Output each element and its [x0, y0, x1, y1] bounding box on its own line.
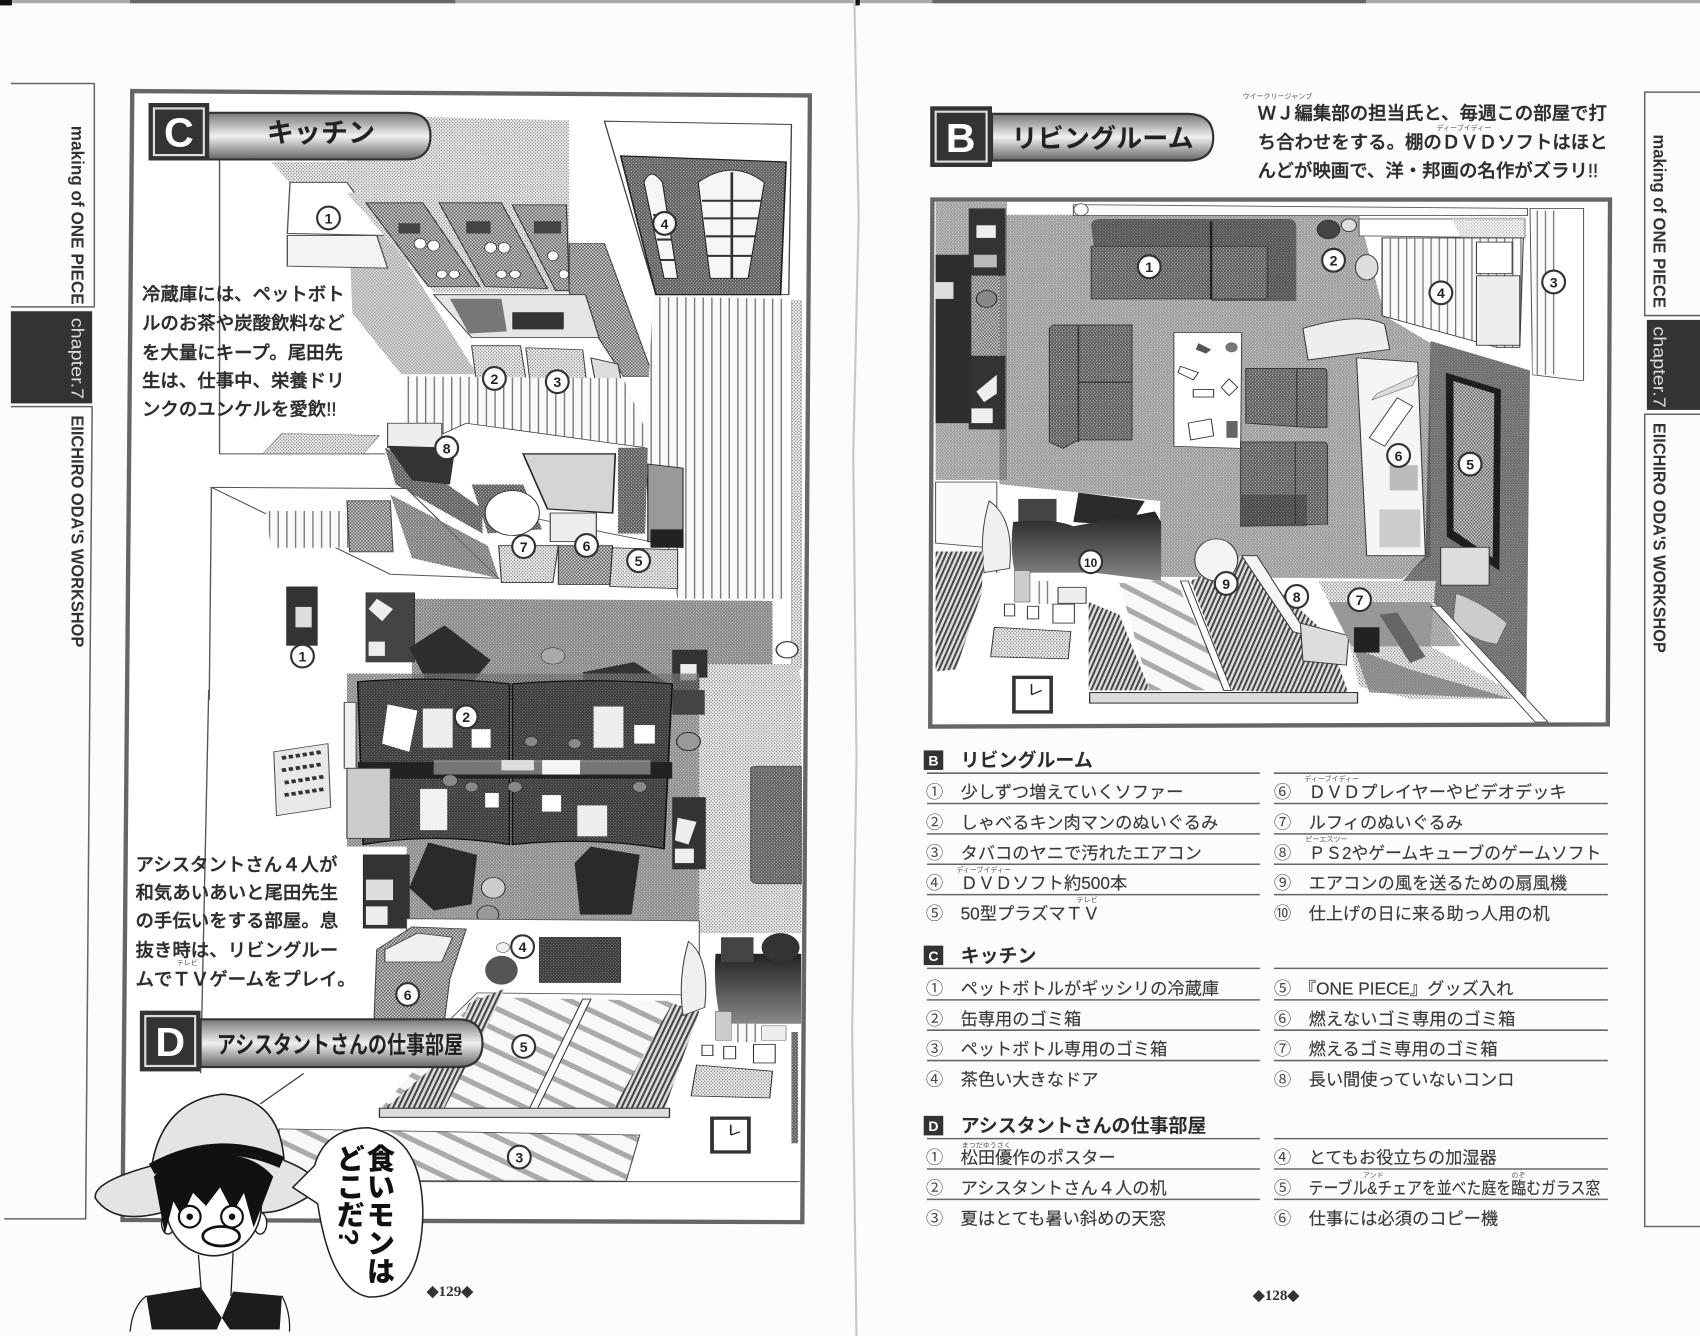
labels: living room numbers: 9: [1222, 576, 1230, 592]
list heading C: キッチン: [961, 946, 1036, 967]
callout: speech bubble: どこだ?: [333, 1144, 365, 1246]
list: D assistants room: ③: [926, 1208, 943, 1228]
page number 128: ◆128◆: [1252, 1287, 1299, 1304]
labels: kitchen and office numbers: 3: [515, 1149, 523, 1165]
labels: kitchen and office numbers: 1: [325, 210, 333, 226]
list: B living room: ①: [926, 782, 943, 802]
text block: assistants note: ムでＴＶゲームをプレイ。: [136, 969, 356, 990]
heading: D assistants room: アシスタントさんの仕事部屋: [217, 1032, 463, 1059]
list heading C: [924, 946, 1036, 967]
text block: assistants note: アシスタントさん４人が: [136, 854, 337, 875]
tab text: making of ONE PIECE: making of ONE PIECE: [1649, 134, 1669, 308]
tab text: chapter.7: chapter.7: [1649, 326, 1669, 408]
list: C kitchen: ②: [926, 1009, 943, 1029]
list: D assistants room: ②: [926, 1178, 943, 1198]
labels: living room numbers: 6: [1395, 448, 1403, 464]
list: B living room: テレビ: [1077, 895, 1098, 904]
list: B living room: 仕上げの日に来る助っ人用の机: [1309, 904, 1550, 924]
list: C kitchen: 『ONE PIECE』グッズ入れ: [1299, 978, 1513, 998]
text block: assistants note: 抜き時は、リビングルー: [136, 939, 338, 960]
text block: assistants note: テレビ: [177, 958, 198, 967]
list: B living room: ディーブイディー: [1304, 774, 1359, 783]
list: C kitchen: 長い間使っていないコンロ: [1309, 1069, 1515, 1090]
list: B living room: [924, 749, 1608, 924]
list: B living room: ＤＶＤプレイヤーやビデオデッキ: [1309, 782, 1567, 802]
list: B living room: ピーエスツー: [1305, 836, 1348, 844]
heading: C kitchen: [149, 103, 430, 160]
list: D assistants room: アンド: [1363, 1172, 1384, 1180]
text block: kitchen note: [142, 283, 345, 419]
list: C kitchen: ペットボトル専用のゴミ箱: [961, 1039, 1167, 1059]
list: C kitchen: ⑤: [1274, 978, 1291, 998]
callout: speech bubble: 食いモンは: [363, 1144, 395, 1285]
list: C kitchen: ③: [926, 1039, 943, 1059]
page number 129: ◆129◆: [426, 1283, 473, 1300]
text block: living room note: [1242, 93, 1608, 181]
heading: D assistants room: [140, 1011, 482, 1071]
tab text: chapter.7: chapter.7: [68, 318, 88, 399]
list: B living room: ディーブイディー: [956, 865, 1011, 874]
list heading C: C: [928, 948, 939, 964]
list heading B: リビングルーム: [961, 749, 1093, 772]
book spine crease: [852, 0, 859, 1336]
list: C kitchen: ①: [926, 978, 943, 998]
list: D assistants room: 松田優作のポスター: [961, 1148, 1116, 1168]
labels: kitchen and office numbers: 4: [661, 216, 669, 232]
labels: living room numbers: [1079, 249, 1565, 611]
list: B living room: ⑦: [1274, 812, 1291, 832]
labels: living room numbers: 2: [1330, 253, 1338, 269]
right page side tab: [1645, 92, 1700, 1226]
labels: kitchen and office numbers: 7: [520, 539, 528, 555]
list: D assistants room: アシスタントさん４人の机: [961, 1178, 1167, 1198]
list: B living room: ⑤: [926, 904, 943, 924]
list: B living room: エアコンの風を送るための扇風機: [1309, 873, 1567, 893]
list: C kitchen: ⑥: [1274, 1009, 1291, 1029]
labels: kitchen and office numbers: 3: [553, 374, 561, 390]
text block: living room note: ディーブイディー: [1437, 123, 1491, 132]
list: C kitchen: ⑦: [1274, 1039, 1291, 1059]
list: D assistants room: ④: [1274, 1148, 1291, 1168]
list heading D: アシスタントさんの仕事部屋: [961, 1115, 1206, 1137]
heading: B living room: リビングルーム: [1012, 123, 1194, 153]
labels: kitchen and office numbers: 6: [404, 987, 412, 1003]
labels: kitchen and office numbers: 4: [519, 939, 527, 955]
list: B living room: 少しずつ増えていくソファー: [961, 782, 1183, 802]
list: C kitchen: 燃えるゴミ専用のゴミ箱: [1309, 1039, 1498, 1059]
left page side tab: [4, 84, 94, 1219]
labels: kitchen and office numbers: 5: [520, 1039, 528, 1055]
labels: living room numbers: 4: [1437, 285, 1445, 301]
list: B living room: ⑥: [1274, 782, 1291, 802]
text block: assistants note: 和気あいあいと尾田先生: [136, 882, 338, 903]
kitchen illustration: [209, 115, 801, 700]
text block: living room note: ち合わせをする。棚のＤＶＤソフトはほと: [1258, 132, 1608, 153]
text block: kitchen note: を大量にキープ。尾田先: [142, 342, 343, 363]
list: D assistants room: テーブル&チェアを並べた庭を臨むガラス窓: [1309, 1178, 1600, 1198]
list: B living room: ⑨: [1274, 873, 1291, 893]
text block: kitchen note: 冷蔵庫には、ペットボト: [142, 283, 345, 304]
illustration: Luffy character: [95, 1074, 317, 1332]
list heading B: B: [928, 753, 939, 769]
list: C kitchen: [924, 946, 1608, 1090]
labels: living room numbers: 7: [1356, 592, 1364, 608]
list: D assistants room: ①: [926, 1148, 943, 1168]
text block: living room note: ＷＪ編集部の担当氏と、毎週この部屋で打: [1258, 102, 1607, 123]
list: D assistants room: ⑤: [1274, 1178, 1291, 1198]
list: B living room: タバコのヤニで汚れたエアコン: [961, 843, 1202, 863]
list: B living room: ③: [926, 843, 943, 863]
list: D assistants room: まつだゆうさく: [962, 1141, 1011, 1149]
list: B living room: ルフィのぬいぐるみ: [1309, 812, 1463, 832]
labels: kitchen and office numbers: 2: [462, 709, 470, 725]
labels: kitchen and office numbers: 1: [299, 648, 307, 664]
list: D assistants room: [924, 1115, 1608, 1228]
text block: living room note: ウイークリージャンプ: [1242, 93, 1312, 101]
list: B living room: しゃべるキン肉マンのぬいぐるみ: [961, 812, 1218, 832]
list: C kitchen: ⑧: [1274, 1069, 1291, 1090]
list: C kitchen: 茶色い大きなドア: [961, 1069, 1098, 1090]
list: D assistants room: とてもお役立ちの加湿器: [1309, 1148, 1497, 1168]
list: C kitchen: 燃えないゴミ専用のゴミ箱: [1309, 1009, 1515, 1029]
list: B living room: ⑩: [1274, 904, 1291, 924]
labels: kitchen and office numbers: 6: [583, 538, 591, 554]
labels: kitchen and office numbers: [291, 207, 676, 1168]
list: B living room: ⑧: [1274, 843, 1291, 863]
list: D assistants room: 夏はとても暑い斜めの天窓: [961, 1208, 1166, 1228]
list: B living room: 50型プラズマＴＶ: [961, 904, 1100, 924]
top edge scan marks: [0, 0, 1700, 5]
text block: kitchen note: ンクのユンケルを愛飲!!: [142, 398, 336, 419]
callout: speech bubble: [293, 1128, 423, 1297]
labels: kitchen and office numbers: 5: [635, 553, 643, 569]
text block: kitchen note: 生は、仕事中、栄養ドリ: [142, 370, 345, 391]
list: D assistants room: ⑥: [1274, 1208, 1291, 1228]
list: B living room: ＤＶＤソフト約500本: [961, 873, 1127, 893]
list: C kitchen: ④: [926, 1069, 943, 1090]
heading: B living room: [930, 106, 1213, 167]
labels: living room numbers: 8: [1293, 589, 1301, 605]
list heading D: D: [928, 1118, 939, 1134]
list: B living room: ②: [926, 812, 943, 832]
tab text: making of ONE PIECE: making of ONE PIECE: [68, 126, 88, 305]
heading: B living room: B: [946, 115, 975, 161]
list: C kitchen: 缶専用のゴミ箱: [961, 1009, 1081, 1029]
panel: living room floor plan: [930, 200, 1610, 727]
tab text: workshop: EIICHIRO ODA'S WORKSHOP: [1649, 423, 1669, 653]
labels: living room numbers: 1: [1145, 259, 1153, 275]
list: C kitchen: ペットボトルがギッシリの冷蔵庫: [961, 978, 1219, 998]
text block: assistants note: の手伝いをする部屋。息: [136, 910, 338, 931]
labels: living room numbers: 10: [1084, 556, 1098, 570]
text block: assistants note: [136, 854, 356, 990]
living room illustration: [936, 202, 1601, 722]
panel: left floor plan frame: [123, 91, 810, 1222]
list: D assistants room: 仕事には必須のコピー機: [1309, 1208, 1498, 1228]
tab text: workshop: EIICHIRO ODA'S WORKSHOP: [68, 415, 88, 647]
list: B living room: ④: [926, 873, 943, 893]
labels: living room numbers: 3: [1550, 274, 1558, 290]
text block: kitchen note: ルのお茶や炭酸飲料など: [142, 313, 345, 334]
list: B living room: ＰＳ2やゲームキューブのゲームソフト: [1309, 843, 1601, 863]
office illustration: [201, 674, 801, 1182]
labels: living room numbers: 5: [1466, 457, 1474, 473]
heading: D assistants room: D: [155, 1019, 185, 1065]
labels: kitchen and office numbers: 8: [443, 440, 451, 456]
labels: kitchen and office numbers: 2: [490, 371, 498, 387]
text block: living room note: んどが映画で、洋・邦画の名作がズラリ!!: [1258, 160, 1598, 181]
list: D assistants room: のぞ: [1511, 1172, 1525, 1180]
heading: C kitchen: C: [164, 109, 194, 155]
heading: C kitchen: キッチン: [267, 117, 375, 148]
